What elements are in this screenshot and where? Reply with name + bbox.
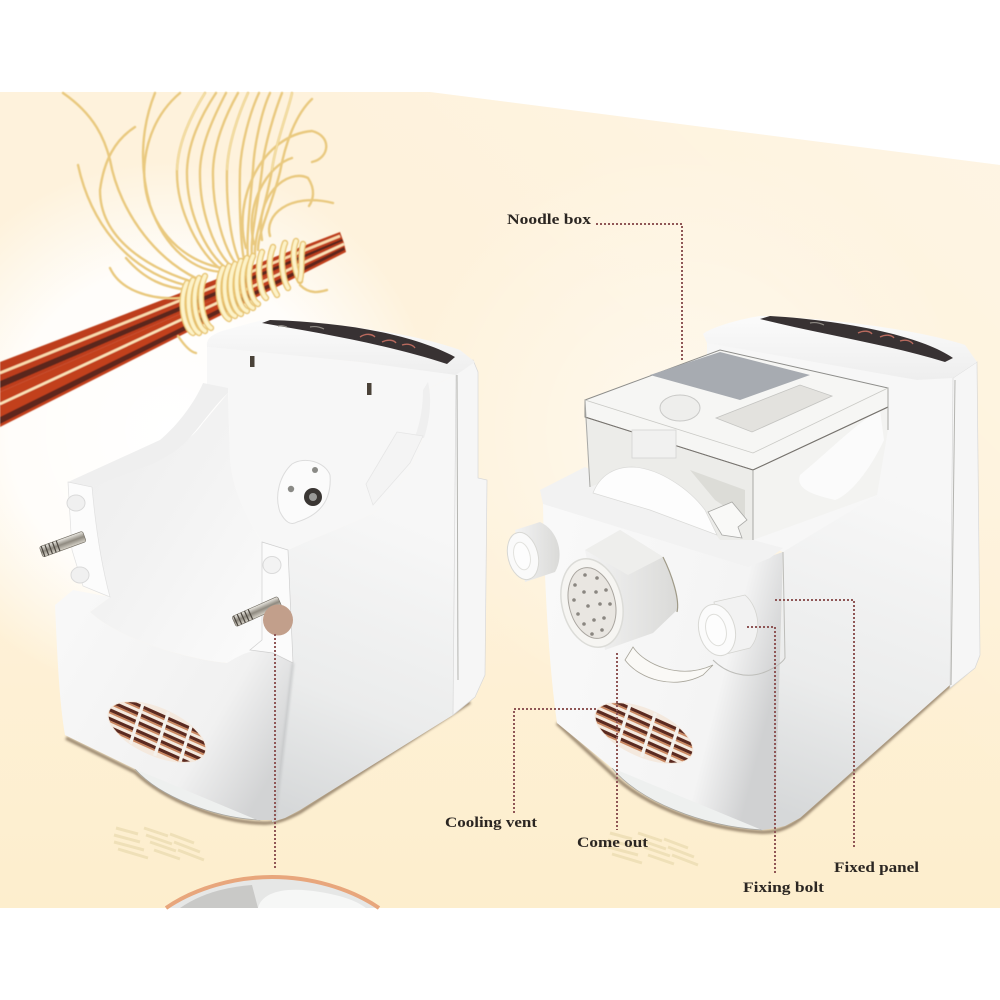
vent reflections xyxy=(114,828,698,865)
callout: fixed panel leader xyxy=(775,600,854,848)
callout: left machine leader xyxy=(274,634,276,868)
front vent xyxy=(96,686,218,778)
box lid circle xyxy=(660,395,700,421)
lower block front face xyxy=(543,503,783,830)
label: cooling vent: Cooling vent xyxy=(445,815,537,831)
right machine: assembled xyxy=(503,316,980,832)
right front panel xyxy=(250,542,293,663)
wall lip xyxy=(415,382,430,438)
ramp strip xyxy=(366,432,423,505)
bowl left wall xyxy=(90,393,262,663)
bowl top lip xyxy=(68,383,228,487)
left pegs xyxy=(67,495,89,583)
upper back panel xyxy=(707,343,953,552)
left small knob xyxy=(503,522,560,583)
right face lower edge xyxy=(275,663,293,820)
front vent xyxy=(583,687,705,779)
tower top surface xyxy=(703,316,977,380)
box lid window xyxy=(716,385,832,432)
shadow under left machine xyxy=(66,702,470,823)
outlet cylinder xyxy=(552,530,678,654)
label: noodle box: Noodle box xyxy=(507,212,592,228)
detail circle xyxy=(166,877,379,908)
left machine: open body xyxy=(39,320,487,823)
label: come out: Come out xyxy=(577,835,648,851)
right peg xyxy=(263,556,281,574)
outlet die face xyxy=(552,552,632,654)
control panel xyxy=(262,320,455,364)
noodles xyxy=(63,93,333,353)
box label sticker xyxy=(650,352,810,400)
noodle box body xyxy=(585,350,888,540)
base disc xyxy=(135,750,275,820)
back wall xyxy=(207,347,456,550)
roller drum xyxy=(593,467,717,535)
right small knob xyxy=(693,595,758,660)
rear tower strip xyxy=(453,360,487,715)
callout: noodle box leader xyxy=(596,224,682,360)
side strip xyxy=(950,362,980,688)
label: fixed panel: Fixed panel xyxy=(834,860,919,876)
tower top xyxy=(207,320,475,375)
callout: cooling vent leader xyxy=(514,709,596,815)
block top lip xyxy=(540,467,783,567)
hub plate xyxy=(278,460,330,524)
left bolt xyxy=(39,531,86,557)
panel seam xyxy=(713,552,785,675)
right bolt xyxy=(232,596,282,627)
tower and side face xyxy=(707,343,953,828)
callout: fixing bolt leader xyxy=(747,627,775,875)
wall slots xyxy=(250,356,372,395)
callout: come out leader xyxy=(616,653,618,830)
washer under outlet xyxy=(625,647,713,682)
left front panel xyxy=(68,482,110,597)
brown peg marker xyxy=(263,604,293,636)
right side face xyxy=(272,374,456,822)
base disc xyxy=(612,750,775,830)
control panel xyxy=(760,316,953,362)
shadow under right machine xyxy=(557,672,965,832)
lower front face xyxy=(55,590,293,820)
noodle coil around chopsticks xyxy=(183,241,303,333)
label: fixing bolt: Fixing bolt xyxy=(743,880,824,896)
chopsticks xyxy=(0,232,346,427)
